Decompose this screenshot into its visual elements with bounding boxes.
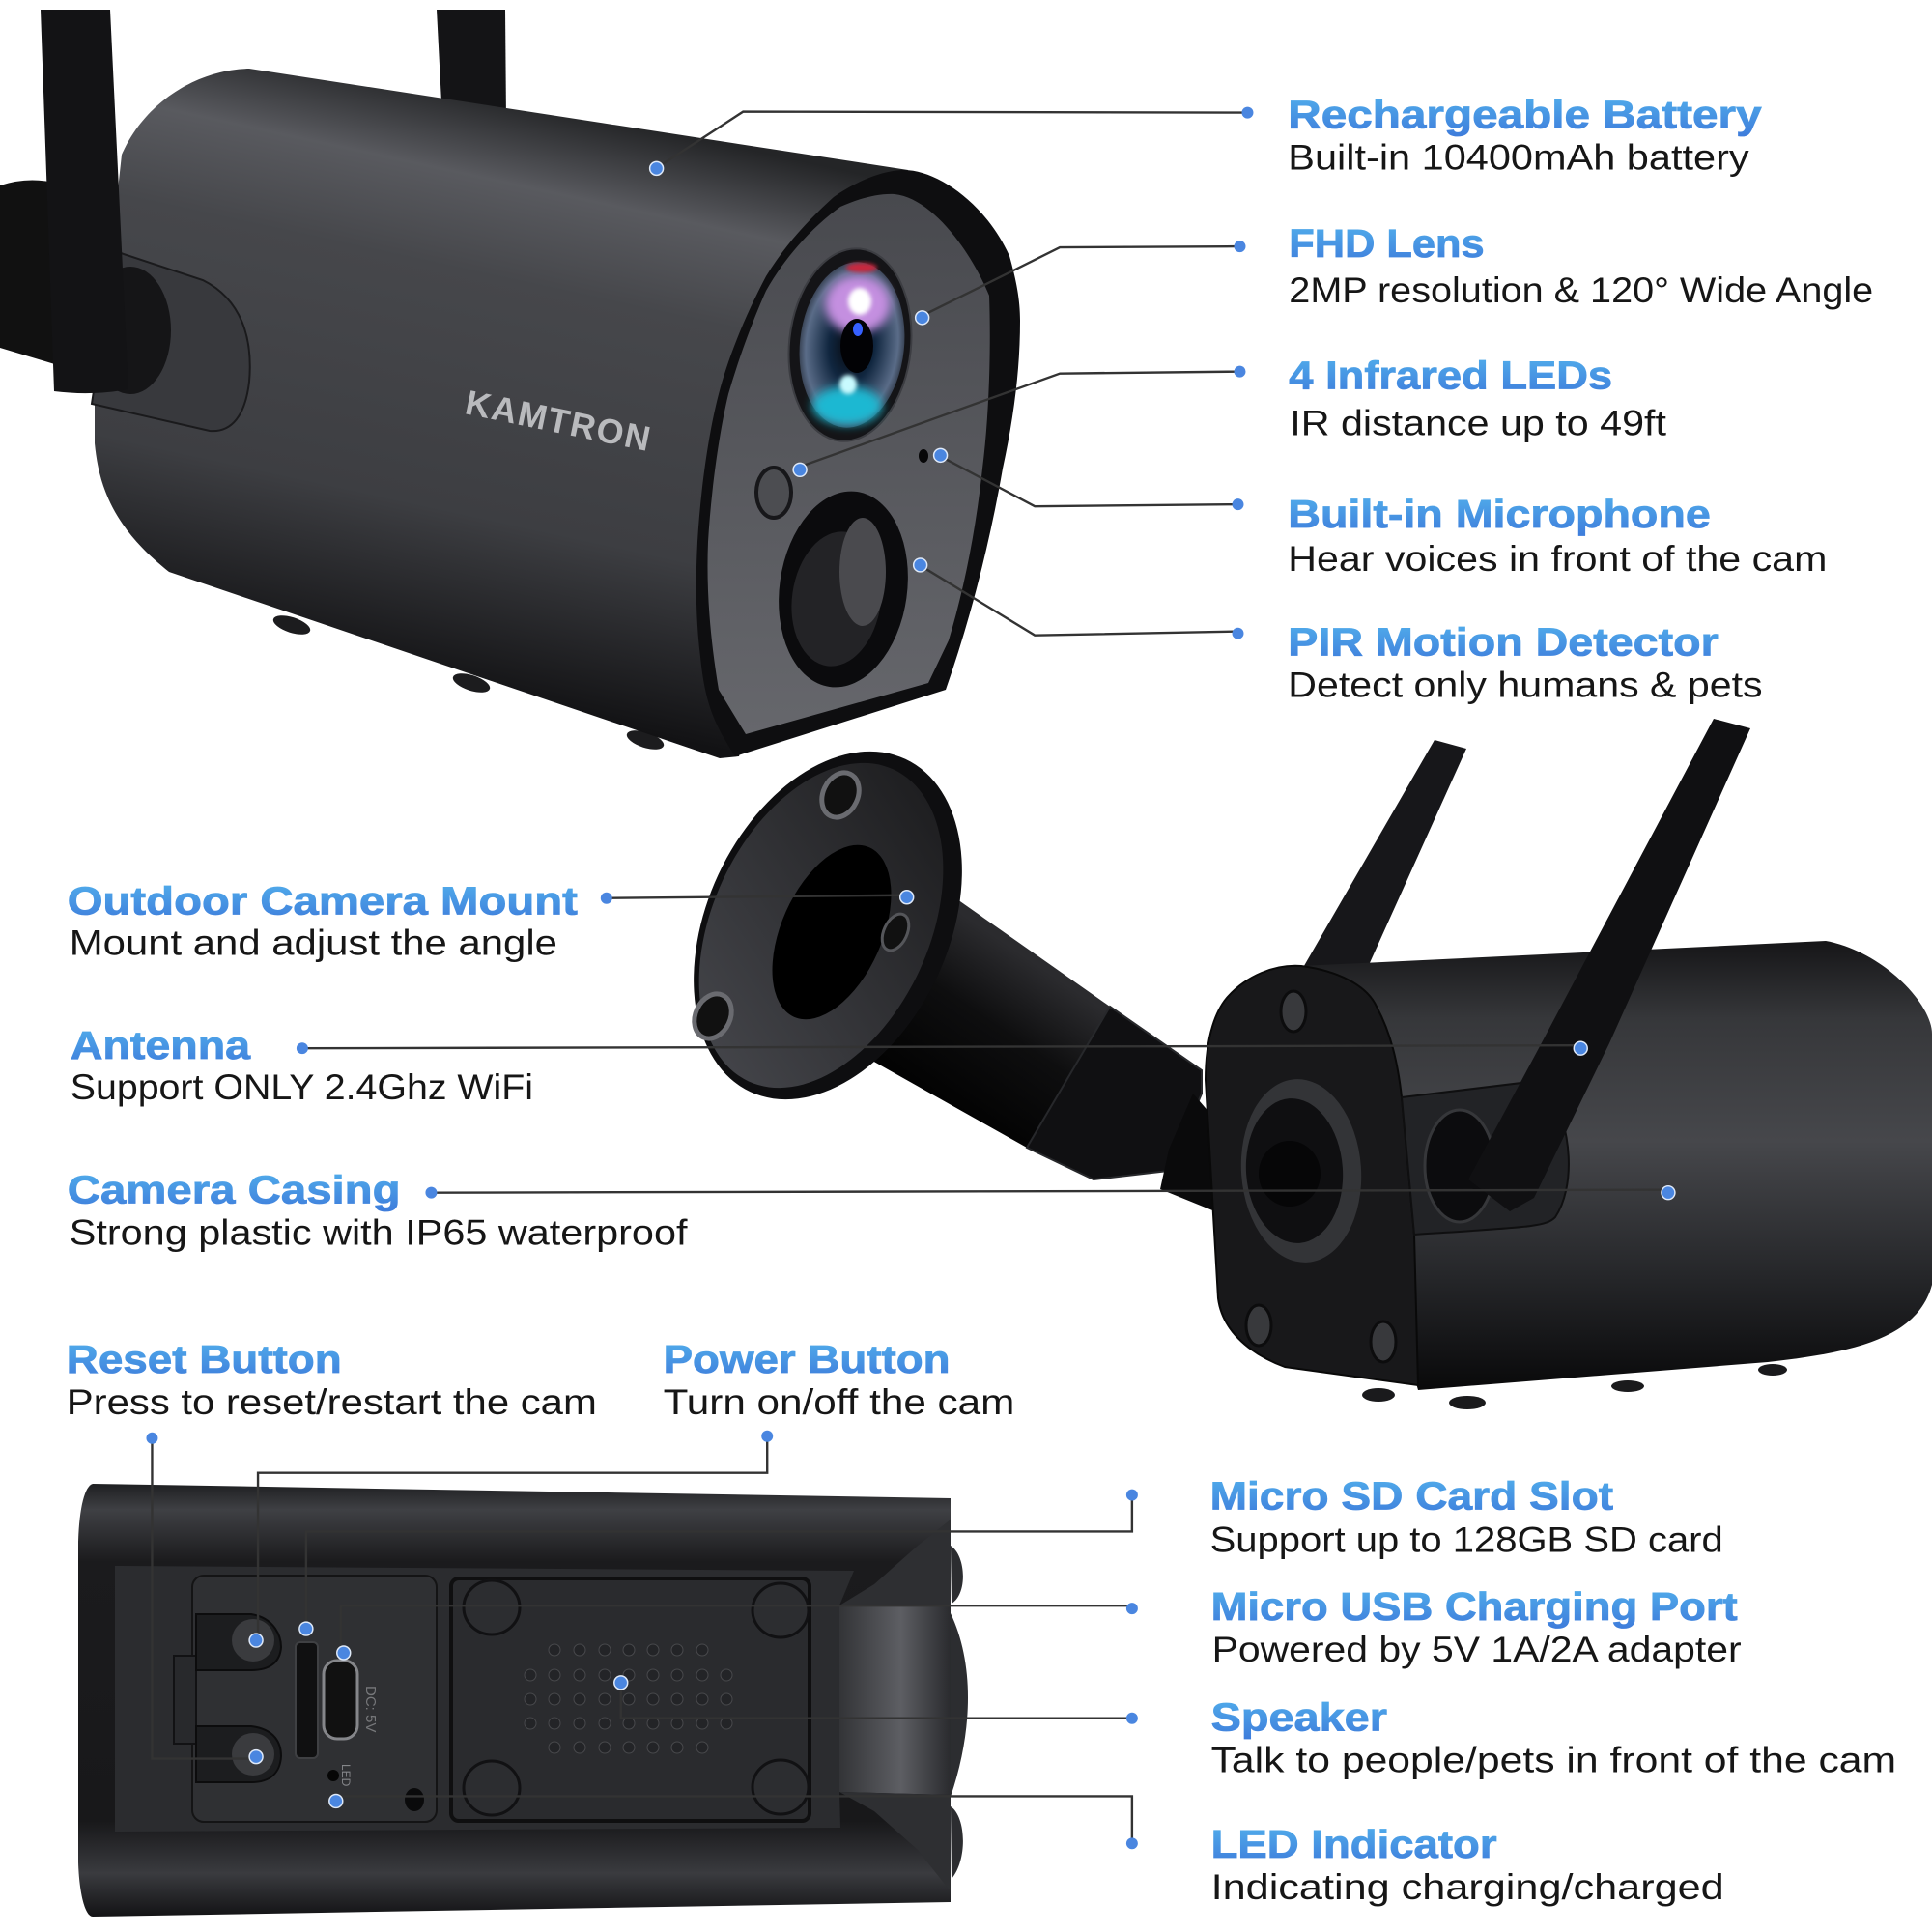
port compartment	[192, 1576, 437, 1822]
camera body side	[95, 69, 908, 758]
feature: Camera Casing	[68, 1168, 688, 1252]
feature: Rechargeable Battery	[1288, 93, 1762, 177]
camera body side	[1301, 941, 1932, 1390]
feature: Outdoor Camera Mount	[68, 879, 578, 963]
feature: Camera Casing: Strong plastic with IP65 waterproof	[70, 1212, 688, 1252]
lens pupil	[840, 319, 873, 373]
lens reflection: white	[848, 288, 871, 315]
camera back face	[1206, 966, 1418, 1385]
lens glass	[791, 257, 913, 433]
leader lines and callout dots	[146, 107, 1675, 1849]
neck	[1259, 1141, 1321, 1207]
feature: Built-in Microphone	[1288, 492, 1827, 579]
mount arm	[848, 893, 1110, 1179]
side recess	[1402, 1080, 1569, 1235]
feature: LED Indicator: LED Indicator	[1211, 1822, 1497, 1866]
feature: 4 Infrared LEDs	[1289, 354, 1666, 442]
rubber foot: top right	[753, 1583, 809, 1637]
feature: Outdoor Camera Mount: Mount and adjust the angle	[70, 923, 557, 963]
feature: Antenna	[71, 1023, 533, 1107]
reset hinge body	[196, 1726, 281, 1782]
feature: Reset Button: Reset Button	[67, 1337, 342, 1381]
mount stub	[0, 180, 58, 365]
plate screw hole: side	[877, 910, 914, 954]
antenna: front	[41, 10, 128, 393]
feature: Camera Casing: Camera Casing	[68, 1168, 401, 1212]
antenna: rear	[437, 10, 506, 121]
panel: front camera view	[0, 10, 1020, 758]
rubber foot: bottom left	[464, 1761, 520, 1815]
lower side wedge	[839, 1792, 951, 1891]
plate surface	[650, 724, 992, 1127]
feature: FHD Lens: FHD Lens	[1289, 221, 1485, 266]
brand logo: KAMTRON	[462, 383, 654, 459]
disc outer	[1236, 1075, 1367, 1266]
feature: Outdoor Camera Mount: Outdoor Camera Mount	[68, 879, 578, 923]
antenna recess	[92, 251, 250, 431]
upper side wedge	[839, 1520, 951, 1605]
microphone hole	[919, 449, 928, 463]
SD card slot	[296, 1642, 318, 1758]
LED hole	[327, 1770, 339, 1781]
lens blue glint	[853, 323, 863, 336]
feature: Power Button	[664, 1337, 1014, 1422]
plate screw hole: top	[815, 767, 866, 823]
mount plate	[640, 708, 1015, 1143]
panel: side camera with mount	[640, 708, 1932, 1409]
side panel	[839, 1605, 951, 1795]
feature: Micro USB Charging Port: Powered by 5V 1A/2A adapter	[1212, 1630, 1742, 1669]
lens reflection: red	[846, 263, 877, 272]
feature: PIR Motion Detector: PIR Motion Detector	[1288, 620, 1719, 665]
feature: Speaker	[1211, 1695, 1896, 1780]
feature: Antenna: Support ONLY 2.4Ghz WiFi	[71, 1067, 533, 1107]
right bumps	[951, 1546, 968, 1879]
lower hole	[405, 1788, 424, 1811]
power button hinge	[196, 1614, 281, 1670]
arm joint	[1160, 1094, 1268, 1216]
USB label: DC: 5V	[362, 1686, 379, 1732]
feature: Built-in Microphone: Hear voices in front of the cam	[1288, 539, 1827, 579]
underside panel	[115, 1566, 854, 1832]
PIR window	[783, 526, 890, 672]
body feet	[1362, 1364, 1787, 1409]
feature: 4 Infrared LEDs: IR distance up to 49ft	[1290, 403, 1666, 442]
plate screw hole: bottom	[688, 988, 738, 1044]
feature: Micro SD Card Slot	[1210, 1474, 1723, 1559]
plate outer	[640, 708, 1015, 1143]
feature: Power Button: Turn on/off the cam	[664, 1382, 1014, 1422]
speaker holes	[525, 1644, 732, 1753]
feature: Speaker: Speaker	[1211, 1695, 1387, 1740]
PIR lens	[839, 518, 886, 626]
feature: Antenna: Antenna	[71, 1023, 250, 1067]
body shell	[78, 1484, 951, 1917]
rubber foot: bottom right	[753, 1760, 809, 1814]
feature: FHD Lens	[1289, 221, 1873, 310]
antenna: rear left	[1301, 740, 1466, 976]
rubber foot: top left	[464, 1580, 520, 1634]
antenna hinge knob	[90, 267, 171, 394]
feature: PIR Motion Detector	[1288, 620, 1763, 704]
feature: FHD Lens: 2MP resolution & 120° Wide Angle	[1289, 270, 1873, 310]
feature: Micro USB Charging Port: Micro USB Charging Port	[1211, 1584, 1738, 1629]
disc inner	[1241, 1095, 1348, 1246]
infrared sensor	[756, 468, 791, 518]
power hinge body	[196, 1614, 281, 1670]
plate hole	[748, 827, 916, 1037]
hinge strap	[174, 1656, 196, 1744]
speaker cover	[451, 1578, 810, 1821]
reset button hinge	[196, 1726, 281, 1782]
PIR sensor	[766, 483, 921, 696]
antenna: front right	[1468, 719, 1750, 1211]
USB port	[324, 1661, 357, 1739]
back screw: lower right	[1371, 1321, 1396, 1362]
LED label: LED	[339, 1764, 353, 1787]
feature: 4 Infrared LEDs: 4 Infrared LEDs	[1289, 354, 1612, 398]
feature: Rechargeable Battery: Built-in 10400mAh battery	[1288, 137, 1749, 177]
feature: LED Indicator: Indicating charging/charged	[1211, 1867, 1724, 1907]
feature: Micro SD Card Slot: Micro SD Card Slot	[1210, 1474, 1614, 1519]
feature: Speaker: Talk to people/pets in front of the cam	[1211, 1741, 1896, 1780]
back screw: lower left	[1246, 1305, 1271, 1346]
feature: Rechargeable Battery: Rechargeable Battery	[1288, 93, 1762, 137]
feature: Power Button: Power Button	[664, 1337, 951, 1381]
back screw: top	[1281, 991, 1306, 1032]
lens reflection: bright spot	[839, 375, 857, 394]
camera face rim	[696, 170, 1020, 756]
lens reflection: magenta	[825, 275, 891, 333]
panel: bottom camera view	[78, 1484, 968, 1917]
camera face plate	[707, 194, 990, 734]
lens bezel	[780, 242, 921, 447]
side knob	[1425, 1110, 1494, 1222]
camera lens	[780, 242, 921, 447]
feature: Reset Button: Press to reset/restart the cam	[67, 1382, 597, 1422]
feature: LED Indicator	[1211, 1822, 1724, 1907]
camera feet	[271, 611, 666, 753]
feature: Micro USB Charging Port	[1211, 1584, 1742, 1669]
reset hinge button	[232, 1733, 274, 1776]
back mount disc	[1236, 1075, 1367, 1266]
power hinge button	[232, 1619, 274, 1662]
arm collar	[1027, 1007, 1202, 1179]
feature: Micro SD Card Slot: Support up to 128GB SD card	[1210, 1520, 1723, 1559]
lens reflection: cyan	[812, 386, 882, 425]
PIR surround	[766, 483, 921, 696]
feature: PIR Motion Detector: Detect only humans & pets	[1288, 665, 1763, 704]
feature: Built-in Microphone: Built-in Microphone	[1288, 492, 1711, 536]
feature: Reset Button	[67, 1337, 597, 1422]
